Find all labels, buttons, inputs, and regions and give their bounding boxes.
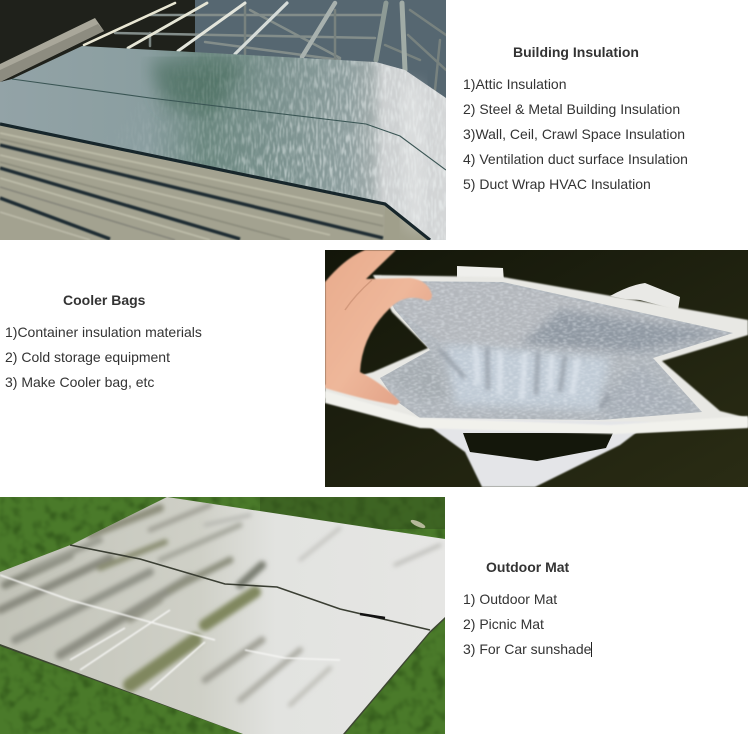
list: outdoor mat uses bbox=[463, 591, 592, 657]
list: building insulation uses: 2) Steel & Metal Building Insulation bbox=[463, 101, 680, 117]
list: outdoor mat uses: 1) Outdoor Mat bbox=[463, 591, 557, 607]
hand bbox=[325, 250, 432, 405]
list: cooler bag uses bbox=[5, 324, 202, 390]
heading: cooler bags: Cooler Bags bbox=[63, 292, 145, 308]
text block: outdoor mat bbox=[463, 559, 592, 657]
photo: silver foil insulation on metal building roof bbox=[0, 0, 446, 240]
list: building insulation uses: 3)Wall, Ceil, Crawl Space Insulation bbox=[463, 126, 685, 142]
list: building insulation uses: 4) Ventilation duct surface Insulation bbox=[463, 151, 688, 167]
list: building insulation uses: 1)Attic Insulation bbox=[463, 76, 566, 92]
photo: insulated cooler bag held open by a hand bbox=[325, 250, 748, 487]
mat seam bbox=[70, 545, 430, 630]
list: building insulation uses bbox=[463, 76, 688, 192]
list: building insulation uses: 5) Duct Wrap HVAC Insulation bbox=[463, 176, 651, 192]
strip bbox=[0, 18, 104, 82]
heading: outdoor mat: Outdoor Mat bbox=[486, 559, 569, 575]
back handle bbox=[610, 283, 680, 310]
ribs bbox=[0, 124, 430, 240]
list: outdoor mat uses: 3) For Car sunshade bbox=[463, 641, 591, 657]
photo: silver outdoor mat on grass bbox=[0, 497, 445, 734]
bottom handle bbox=[418, 418, 650, 487]
bag outer bbox=[325, 275, 748, 434]
heading: building insulation: Building Insulation bbox=[513, 44, 639, 60]
interior bbox=[378, 281, 733, 420]
foil bbox=[0, 46, 446, 240]
text block: building insulation bbox=[463, 44, 688, 192]
list: cooler bag uses: 2) Cold storage equipment bbox=[5, 349, 170, 365]
list: outdoor mat uses: 2) Picnic Mat bbox=[463, 616, 544, 632]
list: cooler bag uses: 1)Container insulation materials bbox=[5, 324, 202, 340]
list: cooler bag uses: 3) Make Cooler bag, etc bbox=[5, 374, 154, 390]
text block: cooler bags bbox=[5, 292, 202, 390]
front rim bbox=[325, 391, 748, 434]
